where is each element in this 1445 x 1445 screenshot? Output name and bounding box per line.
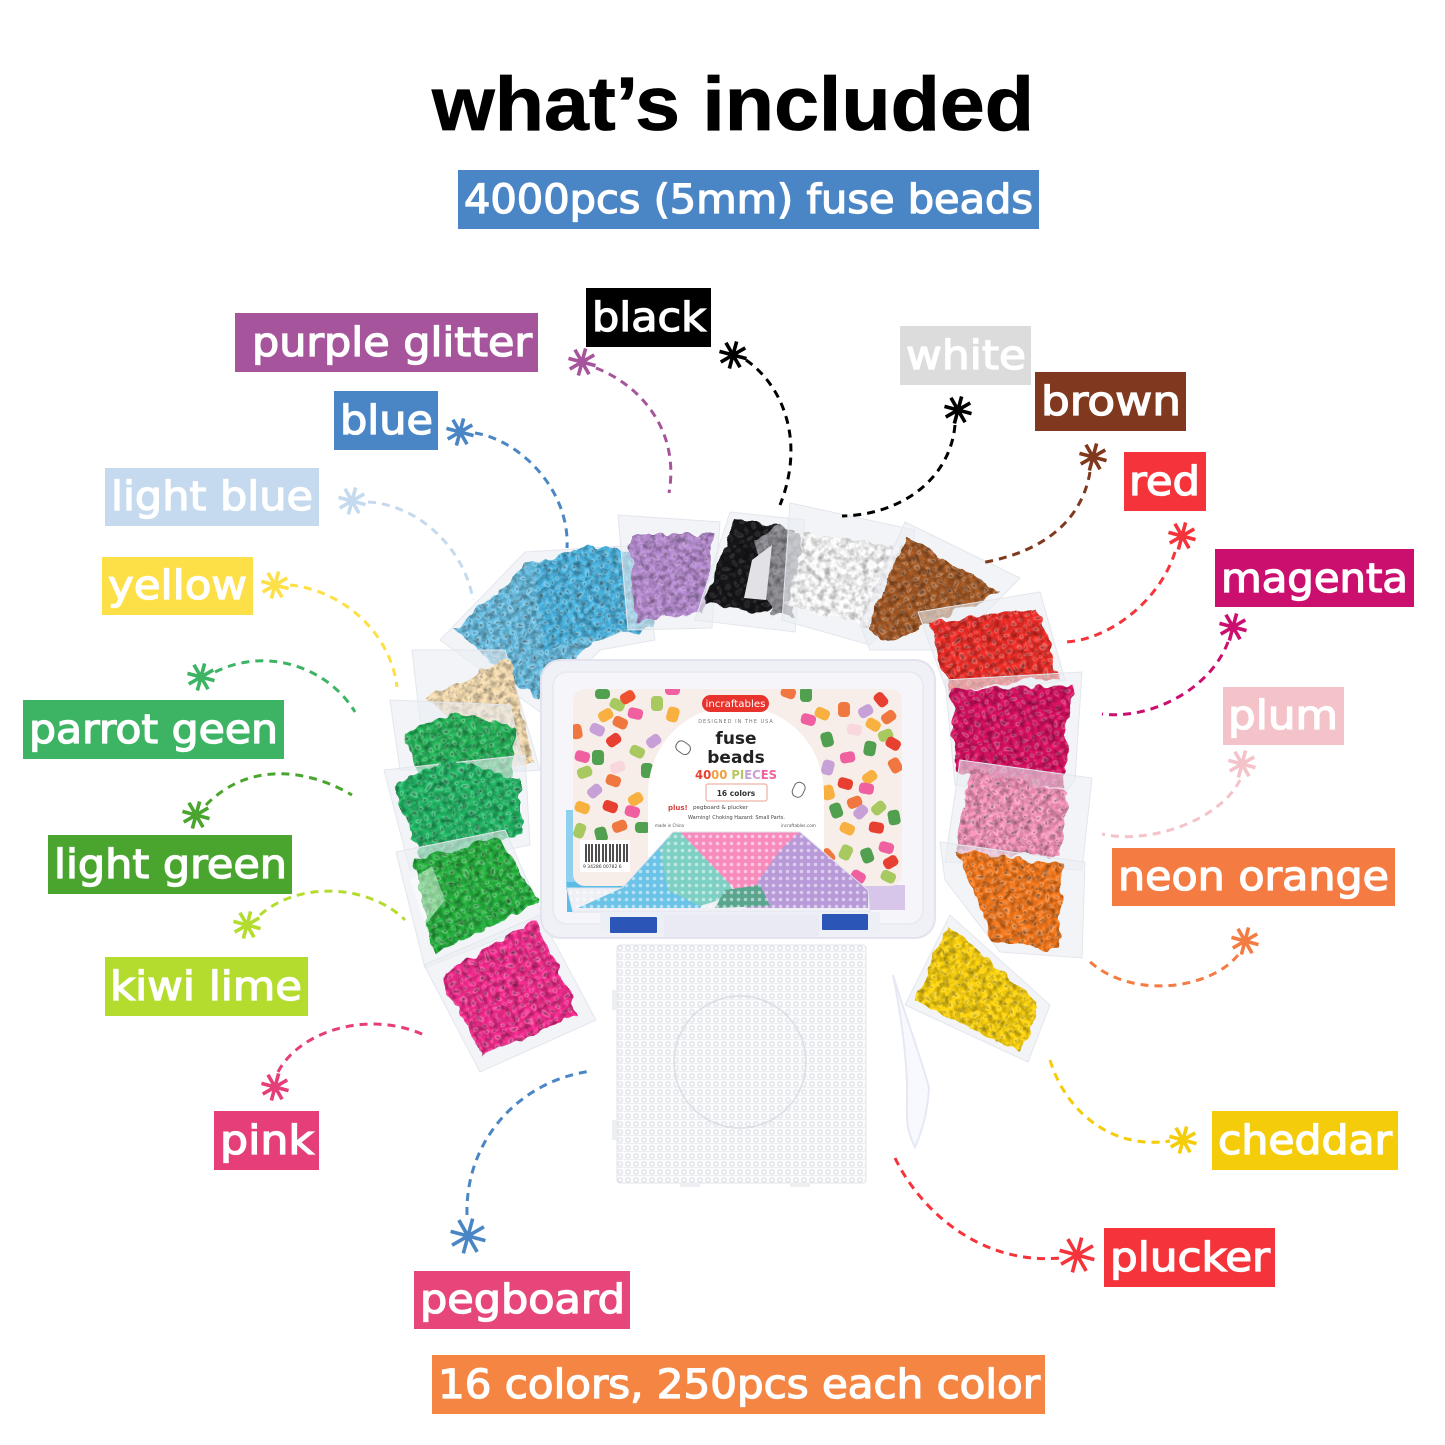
- callout: neon orange: [1088, 848, 1395, 986]
- card text: beads: [707, 748, 765, 768]
- barcode: [580, 840, 630, 872]
- arrow: [1102, 642, 1228, 715]
- asterisk: [1166, 1123, 1200, 1157]
- arrow: [746, 360, 791, 505]
- bag: brown: [860, 522, 1020, 650]
- label: light green: [54, 842, 287, 888]
- label: purple glitter: [252, 320, 533, 366]
- card text: DESIGNED IN THE USA: [698, 719, 774, 725]
- callout: blue: [334, 391, 567, 548]
- label: plum: [1228, 693, 1338, 739]
- card text: made in China: [655, 823, 685, 828]
- arrow: [1050, 1060, 1170, 1142]
- asterisk: [1165, 519, 1199, 553]
- asterisk: [565, 345, 599, 379]
- bag: black: [695, 512, 805, 632]
- label: [1104, 1228, 1275, 1287]
- card text: plus!: [668, 804, 688, 812]
- label: red: [1129, 459, 1200, 505]
- label: brown: [1041, 379, 1181, 425]
- card text: incraftables.com: [781, 823, 816, 828]
- bag: magenta: [945, 672, 1082, 800]
- callout: plucker: [895, 1158, 1275, 1287]
- bag: blue: [535, 545, 652, 650]
- arrow: [895, 1158, 1060, 1259]
- callout: red: [1065, 452, 1206, 642]
- callout: light green: [48, 774, 352, 894]
- asterisk: [1228, 924, 1262, 958]
- brand pill: incraftables: [706, 699, 766, 710]
- label: [105, 468, 319, 526]
- label: [214, 1111, 319, 1170]
- arrow: [206, 774, 352, 805]
- card arch: [648, 710, 824, 858]
- asterisk: [1225, 747, 1259, 781]
- brand pill: [702, 695, 769, 712]
- arrow: [368, 502, 473, 600]
- card text: 16 colors: [717, 789, 756, 798]
- beads inside box: [566, 810, 578, 890]
- label: plucker: [1110, 1235, 1271, 1281]
- asterisk: [1076, 440, 1110, 474]
- callout: yellow: [102, 557, 397, 687]
- arrow: [278, 1024, 424, 1072]
- bag: purple glitter: [618, 515, 720, 630]
- label: cheddar: [1218, 1118, 1393, 1164]
- label: pegboard: [420, 1277, 625, 1323]
- asterisk: [179, 798, 213, 832]
- bag: neon orange: [940, 842, 1085, 958]
- arrow: [475, 433, 567, 548]
- plucker: [893, 975, 929, 1147]
- asterisk: [446, 1214, 490, 1258]
- card text: pegboard & plucker: [693, 805, 749, 811]
- label: black: [592, 295, 707, 341]
- label: white: [906, 333, 1026, 379]
- label: pink: [220, 1118, 315, 1164]
- callout: parrot geen: [23, 660, 355, 759]
- callout: plum: [1102, 687, 1344, 837]
- label: [1223, 687, 1344, 745]
- arrow: [260, 891, 405, 920]
- arrow: [467, 1071, 592, 1215]
- bag glare: [410, 866, 445, 925]
- asterisk: [335, 484, 369, 518]
- label: [1124, 452, 1206, 511]
- bag: white: [782, 503, 915, 645]
- bag: light green: [396, 830, 545, 968]
- barcode: 9 34286 00782 6: [583, 864, 622, 870]
- arrow: [842, 425, 955, 516]
- label: neon orange: [1118, 854, 1389, 900]
- footer heading: 16 colors: 16 colors, 250pcs each color: [438, 1362, 1041, 1408]
- label: [900, 326, 1031, 385]
- arrow: [1102, 780, 1240, 837]
- title: what’s included: [431, 62, 1034, 147]
- card text: fuse: [715, 729, 757, 749]
- callout: pink: [214, 1024, 424, 1170]
- callout: light blue: [105, 468, 473, 600]
- label: kiwi lime: [110, 964, 302, 1010]
- asterisk: [230, 908, 264, 942]
- bag: plum: [945, 760, 1092, 870]
- label: [23, 700, 284, 759]
- product card: [570, 685, 904, 890]
- bag: parrot green: [390, 700, 525, 775]
- label: yellow: [108, 563, 247, 609]
- bag: light blue: [440, 545, 655, 712]
- mini pegboard in box lid: [567, 832, 870, 912]
- box body: [541, 660, 935, 938]
- label: [1035, 372, 1186, 431]
- clasps: [600, 912, 880, 937]
- bag: yellow: [412, 650, 540, 772]
- arrow: [1088, 955, 1238, 986]
- label: magenta: [1221, 556, 1408, 602]
- asterisk: [716, 338, 750, 372]
- label: [586, 288, 711, 347]
- card text: [655, 719, 816, 828]
- callout: kiwi lime: [105, 891, 405, 1016]
- asterisk: [184, 660, 218, 694]
- arrow: [290, 585, 397, 687]
- label: [105, 957, 308, 1016]
- label: parrot geen: [29, 707, 278, 753]
- callout: white: [842, 326, 1031, 516]
- asterisk: [1216, 610, 1250, 644]
- bag: red: [918, 592, 1065, 700]
- card text: 4000 PIECES: [695, 767, 777, 782]
- bag: teal green: [384, 755, 530, 870]
- asterisk: [443, 415, 477, 449]
- label: blue: [340, 398, 433, 444]
- callout: brown: [980, 372, 1186, 563]
- bead icons on card: [674, 739, 807, 799]
- arrow: [596, 368, 671, 493]
- heading: 4000pcs fuse beads: 4000pcs (5mm) fuse beads: [464, 177, 1033, 223]
- callout: magenta: [1102, 549, 1414, 715]
- arrow: [215, 661, 355, 712]
- pegboard: [612, 945, 866, 1187]
- arrow: [980, 472, 1090, 563]
- callout: purple glitter: [235, 313, 671, 493]
- callout: black: [586, 288, 791, 505]
- asterisk: [258, 1070, 292, 1104]
- label: [334, 391, 438, 450]
- card text: Warning! Choking Hazard: Small Parts.: [688, 815, 785, 821]
- label: [1212, 1111, 1398, 1170]
- label: [102, 557, 253, 615]
- storage box: [541, 660, 935, 938]
- bag: pink: [424, 915, 596, 1072]
- label: [48, 835, 292, 894]
- bag: cheddar: [905, 915, 1050, 1062]
- callout: pegboard: [414, 1071, 630, 1329]
- bag glare: [744, 545, 772, 600]
- asterisk: [941, 393, 975, 427]
- label: light blue: [111, 474, 313, 520]
- label: [235, 313, 538, 372]
- asterisk: [1055, 1233, 1099, 1277]
- callout: cheddar: [1050, 1060, 1398, 1170]
- asterisk: [258, 568, 292, 602]
- arrow: [1065, 552, 1175, 642]
- product photo: bead bags: [384, 503, 1092, 1072]
